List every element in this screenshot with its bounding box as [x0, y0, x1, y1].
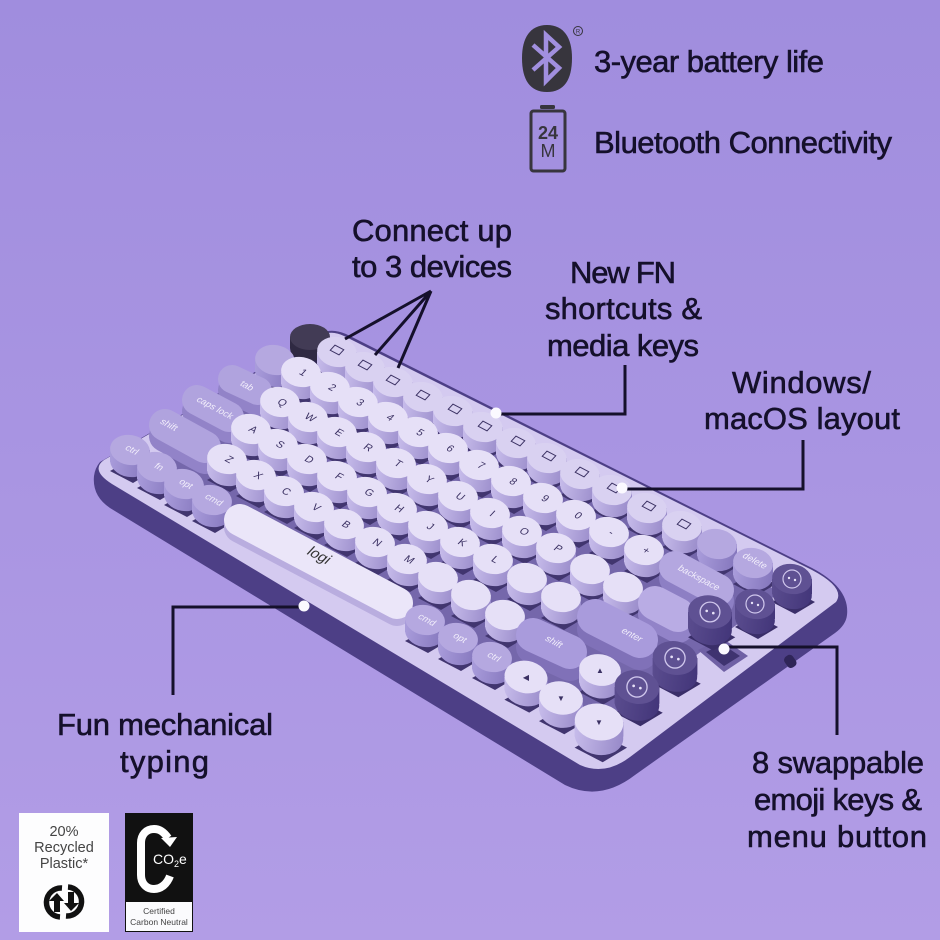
- badge: carbon neutral: [125, 813, 193, 932]
- lifted emoji key: [685, 592, 735, 650]
- key legends: 1: [296, 368, 309, 379]
- key legends: Q: [274, 397, 289, 409]
- callout: Windows/macOS layout: macOS layout: [704, 401, 900, 436]
- badge: carbon neutral: 2: [174, 859, 179, 869]
- icon: bluetooth: R: [576, 30, 581, 36]
- keyboard body: [94, 331, 847, 792]
- callout: connect up to 3 devices: to 3 devices: [352, 249, 512, 284]
- key legends: X: [251, 471, 265, 482]
- key legends: 2: [325, 383, 338, 394]
- key legends: 5: [413, 428, 426, 439]
- key legends: -: [605, 528, 616, 538]
- key legends: F: [332, 472, 345, 483]
- badge: carbon neutral: e: [179, 851, 187, 867]
- key legends: shift: [157, 417, 180, 433]
- space row: [108, 432, 735, 762]
- badge: recycled plastic: Recycled: [34, 840, 94, 856]
- badge: carbon neutral: Certified: [143, 906, 175, 916]
- callout: swappable emoji keys: emoji keys &: [754, 782, 922, 817]
- key legends: fn: [151, 461, 166, 473]
- key legends: 6: [443, 444, 456, 455]
- key legends: A: [246, 425, 260, 436]
- key legends: tab: [237, 379, 256, 393]
- callout: Windows/macOS layout: [616, 365, 900, 494]
- function key row: [290, 324, 815, 614]
- key legends: V: [309, 503, 323, 514]
- key legends: logi: [303, 544, 335, 567]
- home letter row: [197, 400, 748, 672]
- key legends: cmd: [415, 612, 438, 628]
- key legends: N: [370, 537, 384, 549]
- key legends: ◀: [523, 673, 530, 682]
- callout: swappable emoji keys: 8 swappable: [752, 745, 924, 780]
- key legends: T: [391, 459, 405, 470]
- badge: recycled plastic: Plastic*: [40, 856, 89, 872]
- key legends: ctrl: [484, 650, 503, 664]
- key legends: C: [279, 486, 293, 498]
- key legends: K: [455, 538, 469, 549]
- key legends: B: [339, 520, 353, 531]
- key legends: H: [392, 503, 406, 515]
- text: bluetooth connectivity: Bluetooth Connectivity: [594, 125, 892, 160]
- key legends: R: [361, 442, 375, 454]
- switch with key removed: [698, 638, 748, 672]
- key legends: Y: [422, 475, 436, 486]
- key legends: delete: [740, 551, 770, 571]
- callout: fun mechanical typing: [57, 600, 310, 779]
- key legends: enter: [618, 626, 645, 644]
- key legends: ▼: [557, 694, 565, 703]
- key legends: W: [302, 412, 318, 425]
- key legends: opt: [450, 631, 470, 645]
- key legends: shift: [542, 634, 565, 650]
- text: battery life: 3-year battery life: [594, 44, 824, 79]
- key legends: M: [401, 554, 416, 566]
- top letter row: [232, 379, 678, 626]
- key legends: caps lock: [194, 395, 236, 422]
- bottom letter row: [165, 425, 701, 705]
- badge: recycled plastic: [19, 813, 109, 932]
- key legends: ctrl: [122, 443, 141, 457]
- key legends: O: [516, 526, 531, 538]
- key legends: I: [487, 509, 497, 519]
- key legends: Z: [222, 455, 236, 466]
- number key row: [253, 342, 778, 639]
- key legends: L: [488, 555, 501, 566]
- callout: connect up to 3 devices: Connect up: [352, 213, 512, 248]
- key legends: 4: [383, 413, 396, 424]
- key legends: 8: [506, 477, 519, 488]
- callout: swappable emoji keys: menu button: [747, 819, 927, 854]
- badge: recycled plastic: 20%: [49, 824, 79, 840]
- callout: new FN shortcuts: [490, 255, 702, 418]
- key legends: J: [424, 522, 436, 532]
- keyboard: [94, 324, 847, 792]
- callout: fun mechanical typing: Fun mechanical: [57, 707, 273, 742]
- icon: bluetooth: [522, 25, 582, 92]
- callout: new FN shortcuts: New FN: [570, 255, 676, 290]
- callout: new FN shortcuts: shortcuts &: [545, 291, 702, 326]
- space bar: [240, 520, 397, 610]
- callout: fun mechanical typing: typing: [120, 744, 209, 779]
- badge: carbon neutral: CO: [153, 851, 174, 867]
- callout: swappable emoji keys: [718, 644, 927, 854]
- key legends: opt: [176, 477, 196, 491]
- key legends: ▲: [596, 666, 604, 675]
- callout: new FN shortcuts: media keys: [547, 328, 699, 363]
- key legends: G: [361, 487, 376, 499]
- key legends: +: [639, 546, 652, 557]
- icon: battery 24 months: [531, 105, 565, 171]
- badge: carbon neutral: Carbon Neutral: [130, 917, 188, 927]
- key legends: ▼: [595, 718, 603, 727]
- key legends: U: [453, 491, 467, 503]
- key legends: 3: [353, 398, 366, 409]
- key legends: [122, 345, 770, 727]
- key legends: cmd: [202, 492, 225, 508]
- callout: connect up to 3 devices: [345, 213, 512, 368]
- key legends: P: [551, 544, 565, 555]
- key legends: backspace: [675, 563, 722, 593]
- callout: Windows/macOS layout: Windows/: [732, 365, 871, 400]
- key legends: D: [302, 454, 316, 466]
- key legends: E: [332, 428, 346, 439]
- key legends: S: [273, 440, 287, 451]
- icon: battery 24 months: 24: [538, 123, 558, 143]
- icon: battery 24 months: M: [540, 141, 556, 161]
- key legends: 0: [571, 511, 584, 522]
- key legends: 9: [538, 494, 551, 505]
- key legends: 7: [474, 461, 487, 472]
